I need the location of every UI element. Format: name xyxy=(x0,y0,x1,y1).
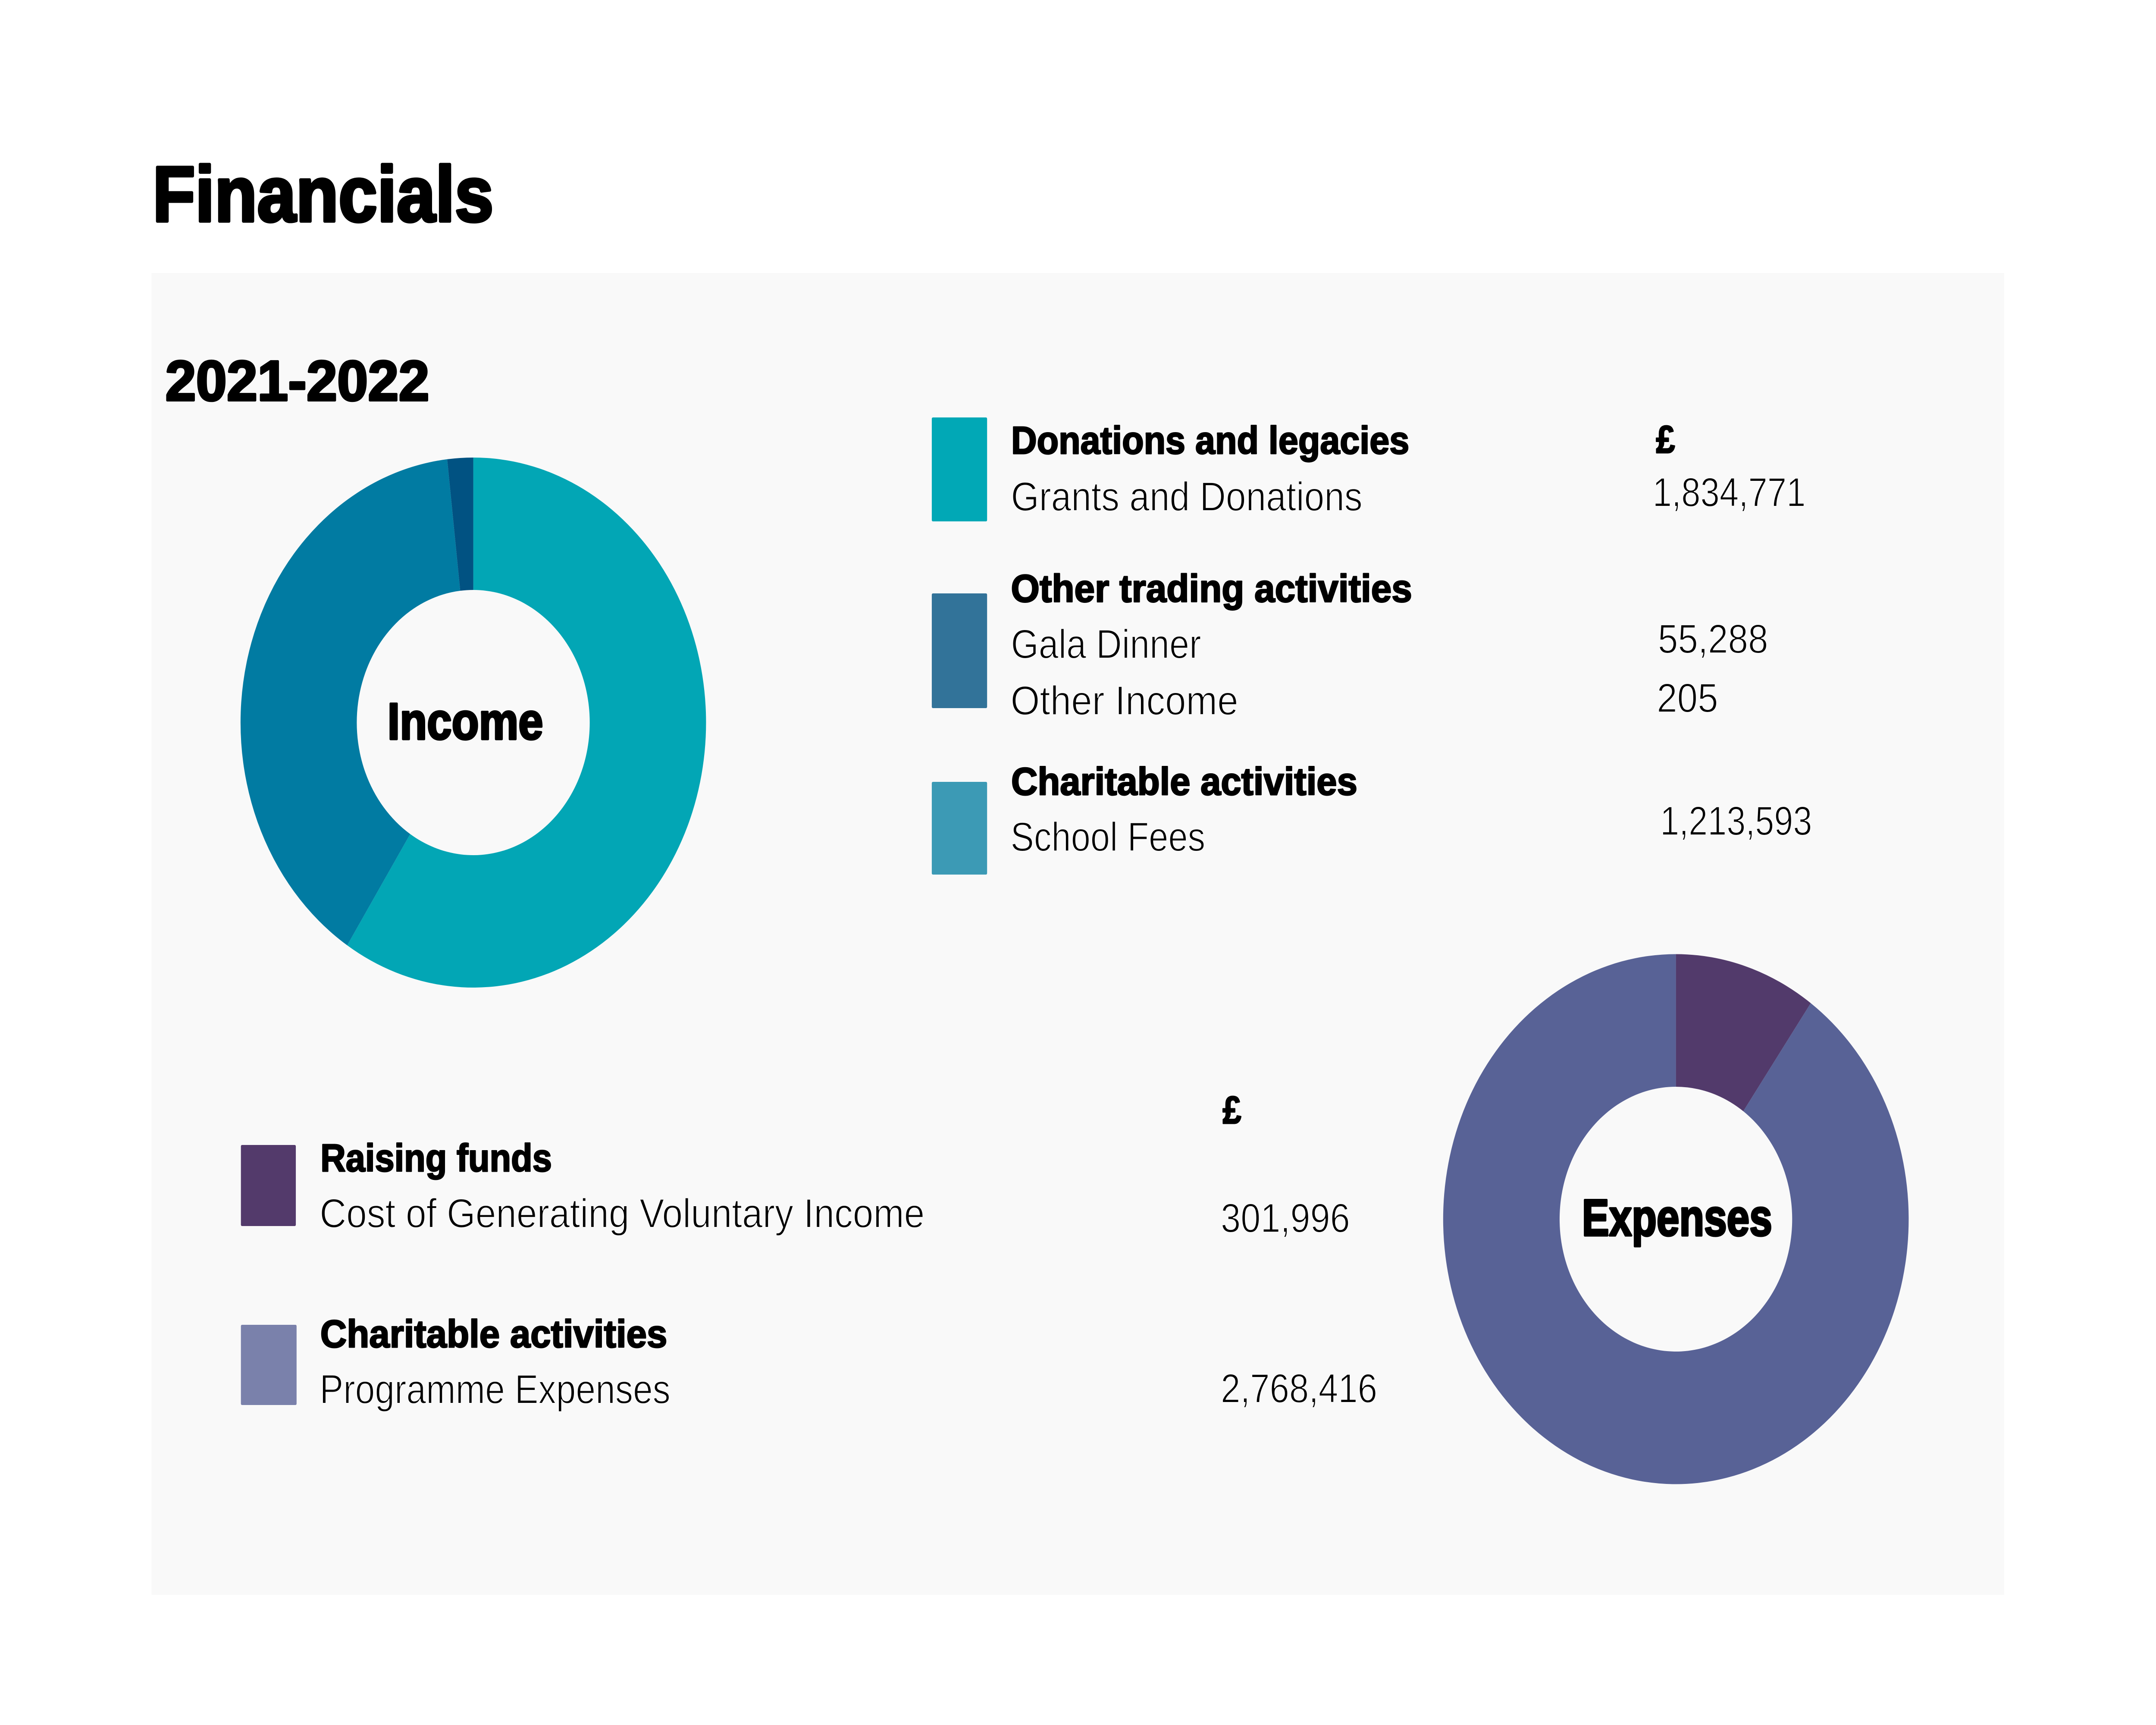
swatch xyxy=(932,417,987,521)
year heading: 2021-2022 xyxy=(165,350,429,413)
item label: Gala Dinner xyxy=(1011,621,1201,667)
swatch xyxy=(932,593,987,708)
swatch xyxy=(241,1145,296,1226)
category heading: Donations and legacies xyxy=(1011,418,1409,462)
legend row: charitable activities xyxy=(932,759,1812,875)
swatch xyxy=(241,1325,297,1405)
value: 205 xyxy=(1657,675,1718,721)
legend row: charitable activities xyxy=(241,1312,1377,1412)
item label: Other Income xyxy=(1011,677,1238,723)
value: 55,288 xyxy=(1658,616,1768,662)
donut chart: expenses xyxy=(1443,954,1908,1484)
legend: expenses xyxy=(241,1088,1377,1412)
category heading: Other trading activities xyxy=(1011,567,1412,610)
category heading: Charitable activities xyxy=(320,1312,667,1355)
legend: income xyxy=(932,417,1812,875)
legend row: other trading activities xyxy=(932,567,1768,723)
slice: charitable activities xyxy=(1443,954,1908,1484)
item label: Programme Expenses xyxy=(320,1366,671,1412)
value: 1,213,593 xyxy=(1660,798,1812,844)
slice: donations and legacies xyxy=(347,458,706,988)
expenses label: Expenses xyxy=(1582,1189,1772,1247)
value: 2,768,416 xyxy=(1221,1365,1377,1411)
panel background xyxy=(151,273,2004,1595)
income label: Income xyxy=(388,693,543,750)
slice: raising funds xyxy=(1676,954,1811,1111)
legend row: raising funds xyxy=(241,1136,1350,1241)
value: 301,996 xyxy=(1221,1195,1350,1241)
slice: charitable activities xyxy=(241,459,460,945)
item label: Grants and Donations xyxy=(1011,474,1363,519)
panel: financial summary xyxy=(151,273,2004,1595)
item label: School Fees xyxy=(1011,814,1205,859)
currency header: £ xyxy=(1656,417,1675,461)
swatch xyxy=(932,782,987,875)
legend row: donations and legacies xyxy=(932,417,1805,521)
currency header: £ xyxy=(1223,1088,1241,1132)
value: 1,834,771 xyxy=(1653,469,1805,515)
title: Financials xyxy=(153,151,494,238)
category heading: Charitable activities xyxy=(1011,759,1357,803)
slice: other trading activities xyxy=(447,458,473,591)
item label: Cost of Generating Voluntary Income xyxy=(320,1190,924,1236)
donut chart: income xyxy=(241,458,706,988)
category heading: Raising funds xyxy=(320,1136,552,1179)
